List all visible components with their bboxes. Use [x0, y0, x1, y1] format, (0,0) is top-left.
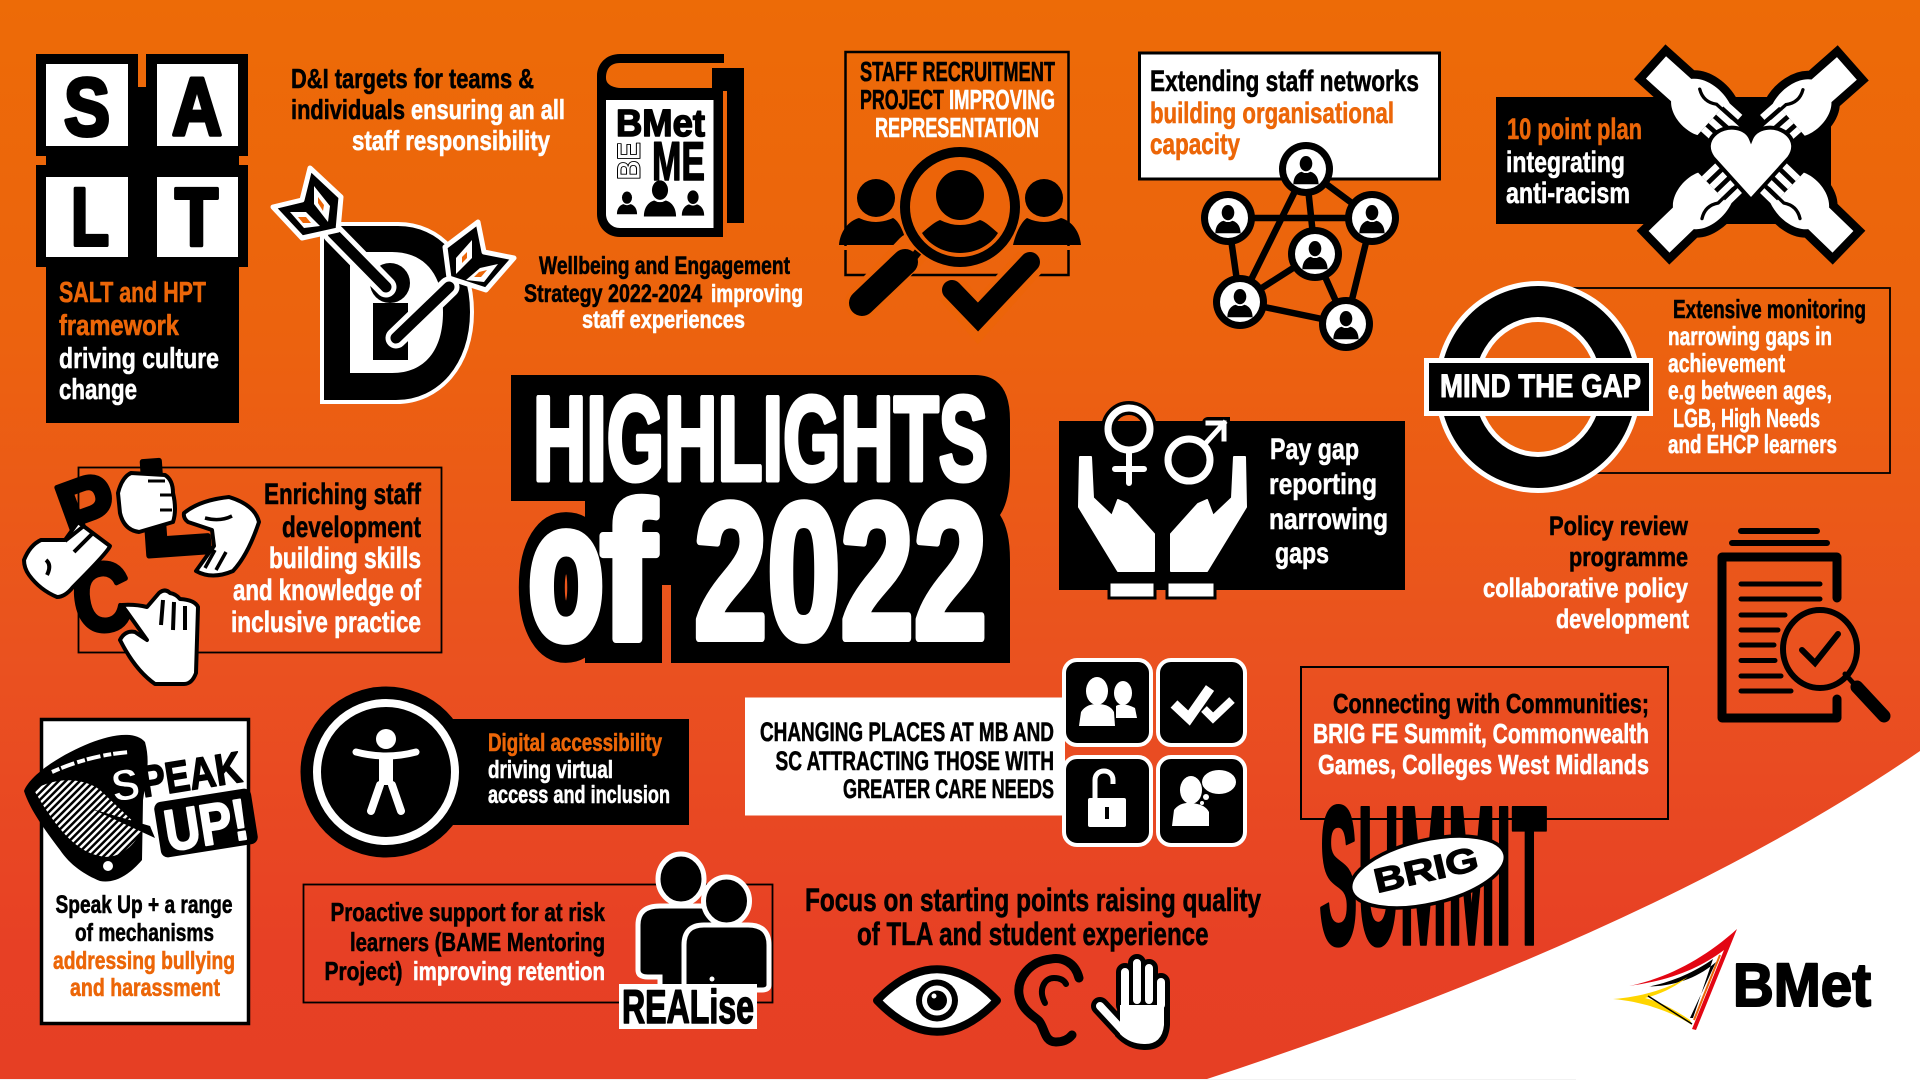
monitoring text: narrowing gaps in	[1668, 321, 1832, 351]
icon: D with arrows	[273, 168, 514, 402]
icon: PLC letters and hands: P	[45, 453, 132, 568]
tile: unlocked padlock	[1064, 757, 1151, 845]
text: D&I targets: D&I targets for teams &	[291, 63, 534, 94]
pay gap text: narrowing	[1269, 503, 1388, 536]
text: D&I targets: ensuring an all	[411, 94, 565, 125]
icon: magnifier with people	[836, 148, 1081, 320]
speak up text: Speak Up + a range	[56, 891, 233, 919]
title: Highlights of 2022: HIGHLIGHTS	[533, 372, 988, 506]
panel: connecting with communities: Games, Colleges West Midlands	[1318, 749, 1649, 780]
accessibility text: Digital accessibility	[488, 729, 662, 757]
icon: REALise people	[619, 854, 769, 1033]
staff recruitment text: IMPROVING	[949, 84, 1055, 115]
text: focus on starting points: of TLA and student experience	[857, 916, 1208, 952]
panel: proactive support: Project)	[324, 956, 402, 986]
tile: people	[1064, 660, 1151, 745]
panel: speak up	[24, 720, 260, 1024]
icon: ear	[1019, 959, 1079, 1042]
text: Wellbeing and Engagement: improving	[711, 280, 803, 308]
tile: thinking person	[1158, 757, 1245, 845]
panel: proactive support: learners (BAME Mentoring	[350, 927, 605, 957]
roundel	[1424, 281, 1653, 493]
speak up text: addressing bullying	[53, 947, 235, 975]
panel: SALT	[36, 54, 248, 423]
panel: changing places	[745, 660, 1245, 845]
monitoring text: and EHCP learners	[1668, 429, 1837, 459]
SALT tiles	[46, 62, 238, 263]
text: Wellbeing and Engagement: Wellbeing and Engagement	[539, 252, 791, 280]
panel: proactive support: improving retention	[413, 956, 605, 986]
icon: BMet Be Me book: ME	[652, 130, 705, 192]
panel: PLC staff development	[24, 428, 442, 684]
speak up text	[53, 891, 235, 1002]
icon: BMet Be Me book: BMet	[616, 103, 705, 145]
icon: BMet Be Me book	[597, 54, 744, 237]
icon: document with magnifier	[1722, 531, 1884, 718]
text: focus on starting points	[805, 882, 1261, 952]
icon: accessibility roundel	[300, 686, 472, 858]
title: Highlights of 2022: f	[600, 463, 657, 681]
text: policy review: collaborative policy	[1483, 573, 1688, 603]
development text	[231, 478, 422, 639]
logo: BMet: BMet	[1733, 951, 1871, 1019]
icon: people network	[1201, 142, 1399, 351]
panel: extending staff networks	[1140, 53, 1440, 179]
10 point plan text: 10 point plan	[1507, 113, 1642, 146]
icon: gender symbols	[1108, 408, 1224, 483]
text: D&I targets: staff responsibility	[352, 125, 550, 156]
panel: proactive support	[304, 884, 772, 1002]
panel: extending staff networks: building organisational	[1150, 97, 1394, 130]
text: Wellbeing and Engagement: staff experiences	[582, 306, 745, 334]
panel: 10 point plan	[1496, 48, 1864, 260]
text: policy review	[1483, 511, 1689, 634]
monitoring text: e.g between ages,	[1668, 375, 1832, 405]
speak text	[108, 743, 245, 812]
SALT tiles: A	[172, 62, 222, 153]
development text: and knowledge of	[233, 574, 422, 607]
panel: digital accessibility	[300, 686, 689, 858]
tile: checks	[1158, 660, 1245, 745]
roundel: MIND THE GAP	[1440, 368, 1641, 404]
speak up text: and harassment	[70, 974, 221, 1002]
development text: Enriching staff	[264, 478, 422, 511]
SALT tiles: S	[64, 62, 110, 153]
accessibility text	[488, 729, 670, 809]
panel: extending staff networks: Extending staff networks	[1150, 65, 1419, 98]
monitoring text: achievement	[1668, 348, 1785, 378]
text: policy review: Policy review	[1549, 511, 1689, 541]
white corner curve	[1204, 751, 1920, 1080]
staff recruitment text: PROJECT	[860, 84, 944, 115]
text: D&I targets	[291, 63, 565, 156]
logo: BRIG summit	[1319, 765, 1547, 986]
monitoring text	[1668, 294, 1866, 459]
SALT tiles: T	[175, 172, 218, 263]
text: policy review: programme	[1569, 542, 1688, 572]
speak up text: of mechanisms	[75, 919, 214, 947]
text: Wellbeing and Engagement: Strategy 2022-2024	[524, 280, 702, 308]
panel: connecting with communities	[1301, 667, 1668, 819]
icon: PLC letters and hands: L	[132, 428, 215, 585]
speak text: PEAK	[138, 743, 245, 807]
SALT text: driving culture	[59, 343, 219, 375]
panel: staff recruitment	[836, 52, 1081, 320]
accessibility text: access and inclusion	[488, 781, 670, 809]
changing places text	[760, 717, 1054, 804]
10 point plan text: integrating	[1506, 146, 1625, 179]
panel: connecting with communities: BRIG FE Summit, Commonwealth	[1313, 718, 1649, 749]
text: policy review: development	[1556, 604, 1689, 634]
icon: supporting hands	[1079, 457, 1246, 598]
icon: shouting mouth	[24, 735, 155, 882]
SALT tiles: L	[71, 172, 109, 263]
logo: BMet	[1613, 929, 1871, 1030]
icon: REALise people: REALise	[622, 980, 754, 1033]
title: Highlights of 2022: o	[528, 463, 604, 681]
development text: development	[282, 511, 421, 544]
icon: BMet Be Me book: BE	[611, 142, 647, 180]
panel: extending staff networks: capacity	[1150, 128, 1240, 161]
icon: eye	[877, 969, 997, 1032]
accessibility text: driving virtual	[488, 756, 613, 784]
staff recruitment text: STAFF RECRUITMENT	[860, 56, 1055, 87]
icon: PLC letters and hands	[24, 428, 259, 684]
panel: proactive support: Proactive support for at risk	[330, 897, 605, 927]
icon: four hands and heart	[1639, 48, 1864, 260]
panel: mind the gap	[1424, 281, 1890, 493]
changing places text: CHANGING PLACES AT MB AND	[760, 717, 1054, 747]
pay gap text: gaps	[1275, 537, 1329, 570]
pay gap text: Pay gap	[1270, 433, 1359, 466]
staff recruitment text	[860, 56, 1055, 143]
speak text: S	[108, 759, 143, 812]
pay gap text: reporting	[1269, 468, 1377, 501]
text: D&I targets: individuals	[291, 94, 405, 125]
panel: connecting with communities: Connecting with Communities;	[1333, 688, 1649, 719]
SALT text: change	[59, 374, 137, 406]
up badge: UP!	[160, 787, 253, 864]
10 point plan text	[1506, 113, 1642, 210]
SALT text: SALT and HPT	[59, 277, 206, 309]
development text: inclusive practice	[231, 606, 421, 639]
pay gap text	[1269, 433, 1388, 570]
title: Highlights of 2022: o	[528, 462, 604, 680]
title: Highlights of 2022	[511, 372, 1010, 681]
text: Wellbeing and Engagement	[524, 252, 803, 334]
10 point plan text: anti-racism	[1506, 177, 1630, 210]
text: focus on starting points: Focus on starting points raising quality	[805, 882, 1261, 918]
icon: PLC letters and hands: C	[66, 541, 138, 655]
SALT text: framework	[59, 310, 180, 342]
logo: BRIG summit: BRIG	[1370, 840, 1482, 901]
changing places text: GREATER CARE NEEDS	[843, 774, 1054, 804]
changing places text: SC ATTRACTING THOSE WITH	[776, 746, 1054, 776]
monitoring text: LGB, High Needs	[1673, 403, 1820, 433]
icon: raised hand	[1100, 963, 1170, 1050]
SALT text	[59, 277, 219, 406]
development text: building skills	[269, 542, 421, 575]
logo mark	[1613, 929, 1737, 1030]
title: Highlights of 2022: 2022	[694, 463, 987, 679]
panel: pay gap	[1059, 408, 1405, 598]
staff recruitment text: REPRESENTATION	[875, 112, 1039, 143]
